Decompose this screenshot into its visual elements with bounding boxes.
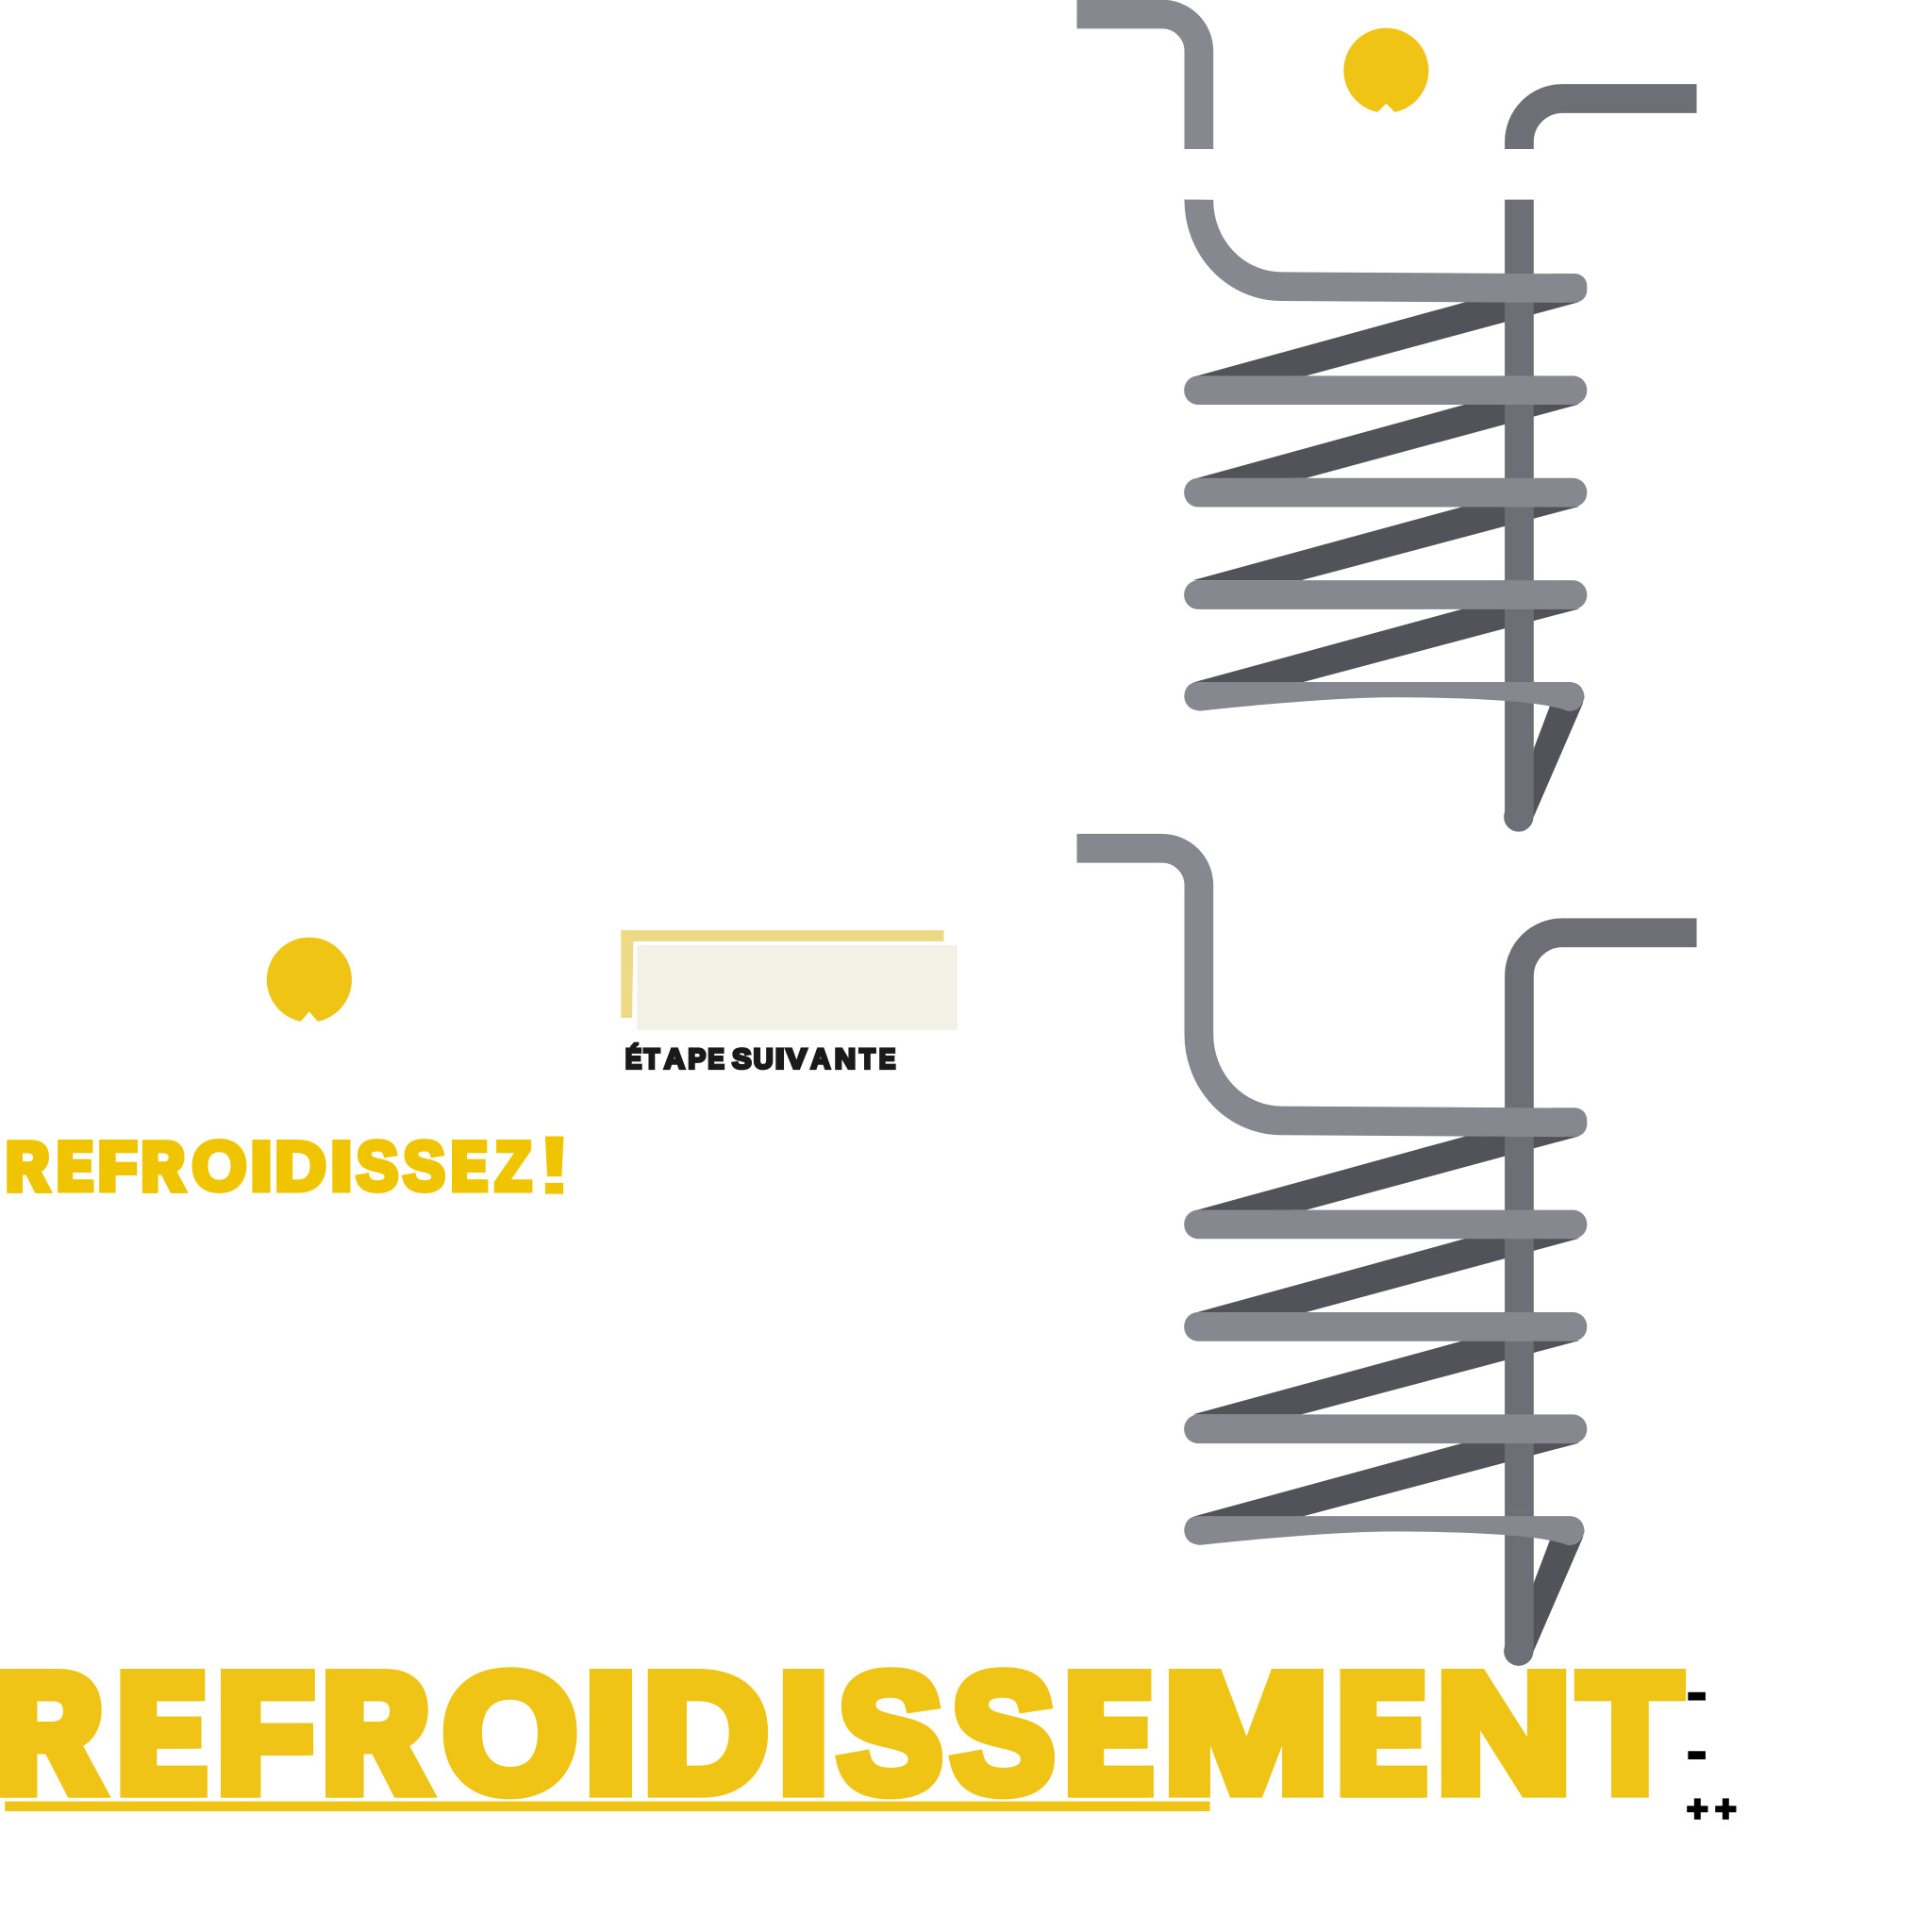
heading: refroidissez: Z	[494, 1128, 532, 1205]
black marks beside title: +	[1687, 1789, 1708, 1829]
heading: refroidissez: D	[275, 1128, 326, 1205]
bottom radiator right pipe	[1504, 933, 1697, 1666]
text: next step label: P	[688, 1044, 706, 1075]
heading: refroidissez: F	[99, 1127, 136, 1205]
black marks beside title	[1686, 1653, 1737, 1829]
title: refroidissement: E	[1070, 1639, 1149, 1826]
heading: refroidissez: !	[533, 1119, 576, 1212]
text: next step label: E	[879, 1042, 895, 1074]
text: next step label: E	[708, 1042, 724, 1074]
top radiator right pipe	[1504, 98, 1697, 832]
icon: top radiator	[1077, 14, 1697, 832]
panel: next step card	[621, 930, 958, 1030]
text: next step label: A	[664, 1044, 685, 1074]
card pale yellow backing	[621, 930, 943, 1018]
heading: refroidissez	[7, 1119, 576, 1212]
black marks beside title: -	[1686, 1712, 1708, 1789]
title: refroidissement: I	[584, 1640, 637, 1827]
black marks beside title: +	[1715, 1789, 1737, 1829]
text: next step label	[625, 1042, 895, 1075]
title: refroidissement: E	[1341, 1640, 1423, 1826]
text: next step label: É	[625, 1042, 641, 1074]
heading: refroidissez: I	[330, 1127, 353, 1205]
top radiator front coil bars	[1184, 375, 1587, 711]
text: next step label: T	[859, 1043, 875, 1075]
heading: refroidissez: S	[356, 1127, 398, 1205]
card cream face	[637, 945, 958, 1030]
heading: refroidissez: R	[7, 1128, 48, 1206]
heading: refroidissez: I	[250, 1127, 273, 1205]
text: next step label: A	[810, 1043, 830, 1075]
title: refroidissement: S	[952, 1640, 1055, 1827]
title: refroidissement: E	[122, 1640, 203, 1826]
text: next step label: I	[775, 1042, 785, 1074]
icon: left water drop	[267, 938, 352, 1022]
bottom radiator rear coil segments	[1192, 1136, 1583, 1666]
icon: bottom radiator	[1077, 848, 1697, 1666]
heading: refroidissez: E	[58, 1127, 92, 1205]
text: next step label: U	[754, 1043, 774, 1075]
title: refroidissement: N	[1437, 1640, 1572, 1826]
text: next step label: N	[835, 1043, 856, 1074]
bottom radiator left pipe	[1077, 848, 1587, 1137]
title: refroidissement: M	[1164, 1641, 1329, 1827]
text: next step label: T	[643, 1043, 660, 1075]
bottom radiator front coil bars	[1184, 1210, 1587, 1545]
title: refroidissement: R	[325, 1639, 426, 1826]
text: next step label: V	[786, 1043, 807, 1074]
title: refroidissement: D	[643, 1640, 768, 1827]
title: refroidissement	[0, 1639, 1681, 1827]
title: refroidissement: R	[0, 1639, 100, 1826]
title: refroidissement: F	[220, 1640, 311, 1826]
top radiator rear coil segments	[1192, 302, 1583, 832]
title underline	[5, 1802, 1210, 1811]
title: refroidissement: S	[838, 1640, 942, 1827]
title: refroidissement: I	[778, 1640, 829, 1827]
title: refroidissement: O	[443, 1641, 577, 1827]
heading: refroidissez: E	[453, 1127, 486, 1205]
black marks beside title: -	[1686, 1653, 1708, 1729]
top radiator left pipe	[1077, 14, 1587, 303]
title: refroidissement: T	[1579, 1640, 1681, 1827]
text: next step label: S	[732, 1043, 752, 1074]
heading: refroidissez: S	[403, 1127, 445, 1205]
heading: refroidissez: O	[192, 1127, 247, 1205]
icon: top water drop	[1343, 28, 1428, 112]
heading: refroidissez: R	[142, 1128, 184, 1206]
